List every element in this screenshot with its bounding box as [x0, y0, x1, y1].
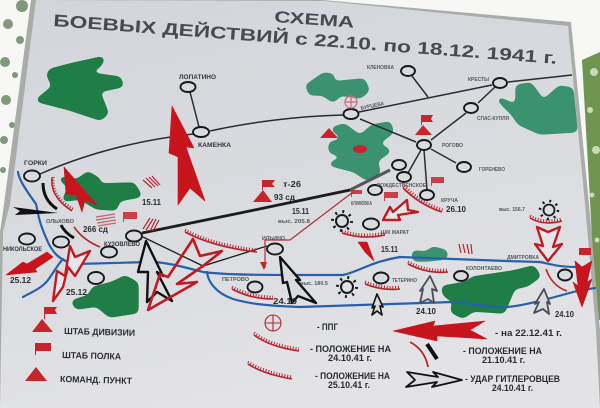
dates and unit labels: 24.10: [416, 307, 437, 316]
dates and unit labels: 25.12: [66, 288, 88, 297]
dates and unit labels: [10, 180, 575, 319]
place labels: выс. 205.8: [278, 219, 310, 225]
place labels: ОЛЬХОВО: [46, 219, 75, 225]
legend right: [393, 321, 562, 393]
legend: division HQ: ШТАБ ДИВИЗИИ: [64, 326, 135, 338]
dates and unit labels: 15.11: [381, 245, 398, 254]
place labels: КУЗОВЛЕВО: [104, 242, 140, 248]
flags and command posts: [123, 115, 444, 222]
place labels: ГОРЕНЕВО: [479, 167, 506, 173]
legend: position 25.10: 25.10.41 г.: [328, 380, 370, 390]
dates and unit labels: 15.11: [142, 198, 162, 207]
place labels: ГОРКИ: [24, 161, 47, 167]
place labels: БУРЦЕВА: [360, 101, 385, 112]
legend: position 21.10: [463, 346, 542, 365]
settlement nodes: [19, 66, 572, 292]
place labels: выс. 180.5: [300, 281, 328, 287]
place labels: СПАС-КУПЛЯ: [477, 116, 509, 122]
place labels: НИКОЛЬСКОЕ: [3, 247, 42, 253]
defence lines: [43, 177, 567, 379]
legend: command post: КОМАНД. ПУНКТ: [60, 374, 133, 386]
legend: position 24.10: 24.10.41 г.: [328, 353, 372, 363]
place labels: [3, 65, 539, 287]
place labels: РОГОВО: [442, 143, 464, 149]
title: СХЕМА: [274, 9, 355, 32]
place labels: КРУЧА: [441, 198, 458, 204]
place labels: КЛЕНОВКА: [367, 65, 394, 71]
place labels: КРЕСТЫ: [468, 77, 490, 83]
place labels: ДМИТРОВКА: [507, 255, 539, 261]
title: БОЕВЫХ ДЕЙСТВИЙ с 22.10. по 18.12. 1941 г.: [53, 11, 558, 68]
place labels: ПЕТРОВО: [222, 277, 250, 283]
red counterattack outlined arrows: [53, 200, 562, 301]
dates and unit labels: 26.10: [446, 205, 467, 214]
legend: position 24.10: - ПОЛОЖЕНИЕ НА: [310, 344, 391, 354]
forests: [39, 59, 575, 316]
place labels: ЛОПАТИНО: [179, 75, 216, 81]
legend: date 22.12: - на 22.12.41 г.: [495, 328, 562, 338]
legend: German strike: - УДАР ГИТЛЕРОВЦЕВ: [465, 374, 560, 384]
legend: German strike: 24.10.41 г.: [492, 383, 533, 393]
place labels: Ш/К МАРАТ: [381, 230, 410, 236]
legend: black arrow: [406, 372, 462, 387]
gear symbols: [332, 201, 558, 296]
legend middle: [265, 315, 391, 390]
legend: position 25.10: [315, 371, 390, 390]
legend: position arcs: [410, 342, 437, 367]
dates and unit labels: 24.10: [555, 310, 575, 319]
title: [53, 9, 558, 68]
place labels: КОЛОНТАЕВО: [466, 266, 503, 272]
dates and unit labels: т-26: [283, 180, 302, 189]
place labels: ИЛЬИНО: [262, 236, 286, 242]
legend: PPG: - ППГ: [317, 322, 338, 332]
dates and unit labels: 24.10: [273, 297, 298, 306]
place labels: выс. 156.7: [499, 207, 525, 213]
legend: regiment HQ: ШТАБ ПОЛКА: [62, 350, 122, 362]
roads: [40, 75, 572, 270]
place labels: РОЖДЕСТВЕНСКОЕ: [377, 183, 426, 189]
rivers: [18, 172, 595, 307]
legend: position 25.10: - ПОЛОЖЕНИЕ НА: [315, 371, 390, 381]
place labels: КАМЕНКА: [198, 143, 232, 149]
large zigzag arrow near Kuzovlevo: [148, 239, 222, 310]
legend: German strike: [465, 374, 560, 393]
hatch marks: [96, 176, 472, 254]
place labels: КЛИМОВКА: [351, 201, 372, 207]
red attack arrows: [6, 106, 592, 307]
black attack arrows: [13, 207, 550, 315]
dates and unit labels: 15.11: [292, 207, 309, 216]
place labels: ТЕТЕРИНО: [392, 278, 418, 284]
legend: red arrow: [393, 321, 487, 341]
legend: position 21.10: 21.10.41 г.: [482, 355, 525, 365]
legend: position 21.10: - ПОЛОЖЕНИЕ НА: [463, 346, 542, 356]
ППГ symbol on map: [345, 96, 357, 108]
legend: position 24.10: [310, 344, 391, 363]
dates and unit labels: 266 сд: [83, 225, 108, 234]
legend left: [25, 307, 135, 386]
dates and unit labels: 25.12: [10, 276, 32, 285]
dates and unit labels: 93 сд: [274, 193, 295, 202]
